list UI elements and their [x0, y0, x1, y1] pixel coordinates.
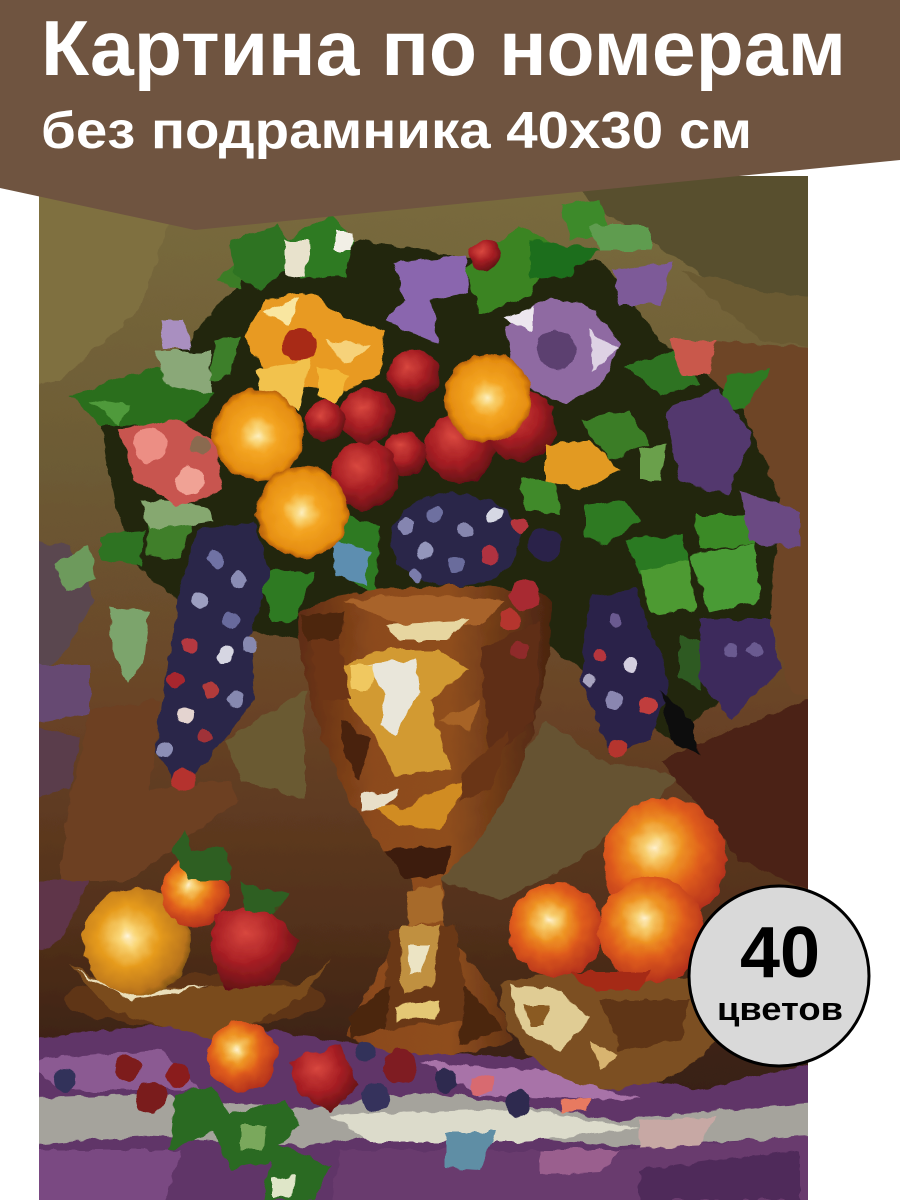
- grapes centre: [390, 494, 562, 659]
- pink flower: [118, 418, 222, 508]
- badge number: 40: [740, 913, 820, 993]
- badge label: цветов: [717, 991, 843, 1027]
- left fruit plate: [65, 830, 330, 1040]
- front strawberries and sprig: [53, 1021, 531, 1200]
- purple flowers: [160, 255, 800, 548]
- title: Картина по номерам: [41, 4, 846, 92]
- painting background: [39, 176, 808, 1090]
- yellow flower: [245, 292, 385, 410]
- subtitle: без подрамника 40х30 см: [41, 102, 752, 160]
- red fruits: [305, 239, 556, 510]
- color count badge: [689, 886, 869, 1066]
- grapes left: [155, 522, 270, 793]
- right fruit bowl: [500, 798, 730, 1088]
- grapes right: [580, 590, 780, 758]
- painting: [20, 160, 830, 1200]
- vase: [297, 586, 552, 1054]
- table cloth: [20, 1020, 830, 1200]
- green leaves: [55, 200, 770, 690]
- oranges: [212, 354, 620, 558]
- header banner: [0, 0, 900, 230]
- dark foliage mass: [100, 240, 780, 740]
